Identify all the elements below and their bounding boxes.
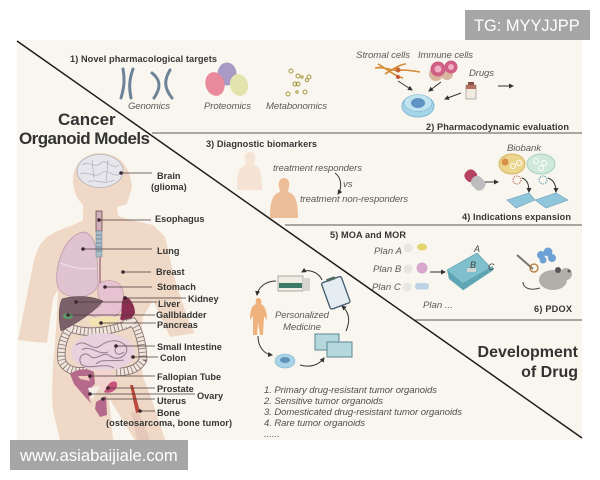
labels: plans: Plan C — [372, 282, 401, 293]
title: Cancer Organoid Models: Organoid Models — [19, 129, 150, 148]
label: metabonomics: Metabonomics — [266, 101, 327, 112]
icon: darker person — [270, 178, 298, 218]
organ labels: (glioma) — [151, 182, 187, 192]
organ labels: Liver — [158, 299, 180, 309]
icon: petri dish — [402, 94, 434, 117]
arrows: personalized medicine cycle — [257, 271, 349, 366]
labels: plans: Plan B — [373, 264, 402, 275]
organ: esophagus and trachea — [96, 211, 106, 286]
panel: background — [17, 40, 582, 440]
organ: uterus and fallopian tube — [70, 369, 117, 417]
organ labels: Esophagus — [155, 214, 205, 224]
labels: plate wells — [470, 244, 495, 272]
icon: drug bottle — [466, 82, 476, 99]
watermark: TG: TG: MYYJJPP — [474, 17, 580, 35]
icon: capsule — [462, 167, 488, 193]
organ pointer dots — [66, 171, 142, 413]
icon: syringe — [517, 255, 538, 272]
organ labels: Breast — [156, 267, 185, 277]
list: organoid types: ...... — [264, 429, 280, 440]
labels: plate wells: C — [488, 262, 495, 272]
arrows: into dish — [398, 81, 513, 99]
list: organoid types — [263, 385, 462, 440]
organ pointer lines — [68, 173, 195, 411]
icon: organoid plates — [315, 334, 352, 357]
list: organoid types: 3. Domesticated drug-resistant tumor organoids — [264, 407, 462, 418]
label: treatment non-responders: treatment non-responders — [300, 194, 408, 205]
label: vs: vs — [343, 179, 353, 190]
arrow: responders comparison — [335, 173, 341, 194]
heading: MOA and MOR: 5) MOA and MOR — [330, 230, 406, 240]
icon: immune cells — [429, 60, 458, 81]
arrows: organoids to plates — [522, 178, 556, 192]
heading: novel pharmacological targets: 1) Novel pharmacological targets — [70, 54, 217, 64]
organ labels: Brain — [157, 171, 181, 181]
organ: gallbladder — [63, 313, 73, 319]
organ labels: Lung — [157, 246, 179, 256]
title: Cancer Organoid Models: Cancer — [58, 110, 116, 129]
organ labels: Colon — [160, 353, 186, 363]
organ labels: Prostate — [157, 384, 194, 394]
organ labels: (osteosarcoma, bone tumor) — [106, 418, 232, 428]
organ: small intestine — [71, 333, 135, 371]
icon: organoid circles — [513, 176, 547, 184]
heading: pharmacodynamic evaluation: 2) Pharmacodynamic evaluation — [426, 122, 569, 132]
watermark: website: www.asiabaijiale.com — [19, 446, 178, 465]
icon: organoid dish — [275, 354, 295, 368]
organ labels — [106, 171, 232, 428]
organ labels: Pancreas — [157, 320, 198, 330]
icon: stromal cells — [375, 64, 420, 79]
organ: bone — [130, 385, 150, 440]
label: immune cells: Immune cells — [418, 50, 473, 61]
organ: brain — [77, 154, 123, 188]
icon: mouse — [523, 267, 572, 290]
icon: blue cells — [537, 248, 556, 264]
watermark: website — [10, 440, 188, 470]
label: drugs: Drugs — [469, 68, 494, 79]
organ labels: Bone — [157, 408, 180, 418]
illustration: human body — [18, 153, 195, 440]
organ: lung — [57, 232, 98, 297]
icon: well plates — [507, 193, 568, 208]
labels: plate wells: B — [470, 260, 476, 270]
title: Development of Drug — [478, 344, 579, 381]
list: organoid types: 2. Sensitive tumor organoids — [263, 396, 383, 407]
organ labels: Kidney — [188, 294, 220, 304]
organ labels: Stomach — [157, 282, 196, 292]
organ labels: Uterus — [157, 396, 186, 406]
icon: biobank dishes — [499, 154, 555, 174]
icon: multi-well plate — [447, 253, 493, 290]
organ labels: Fallopian Tube — [157, 372, 221, 382]
title: Development of Drug: Development — [478, 344, 579, 361]
heading: diagnostic biomarkers: 3) Diagnostic biomarkers — [206, 139, 317, 149]
icon: chromosomes — [121, 69, 172, 98]
icon: drug box — [278, 276, 310, 291]
arrow: capsule to dish — [485, 181, 498, 183]
watermark: TG — [465, 10, 590, 40]
labels: plans: Plan ... — [423, 300, 453, 311]
arrow: plans to plate — [430, 271, 445, 273]
label: treatment responders: treatment responders — [273, 163, 362, 174]
organ: kidney — [120, 296, 135, 321]
label: personalized medicine: Personalized — [275, 310, 330, 321]
icons: plan pills — [402, 244, 429, 292]
label: stromal cells: Stromal cells — [356, 50, 410, 61]
icon: metabolite circles — [286, 69, 311, 96]
heading: PDOX: 6) PDOX — [534, 304, 573, 314]
title: Cancer Organoid Models — [19, 110, 150, 148]
organ: stomach — [86, 281, 124, 319]
icon: light person — [237, 152, 262, 190]
icon: clipboard — [320, 274, 350, 310]
list: organoid types: 4. Rare tumor organoids — [264, 418, 365, 429]
label: proteomics: Proteomics — [204, 101, 251, 112]
label: biobank: Biobank — [507, 143, 542, 154]
list: organoid types: 1. Primary drug-resistant tumor organoids — [264, 385, 437, 396]
labels: plate wells: A — [473, 244, 480, 254]
panel dividers — [17, 41, 582, 438]
organ labels: Ovary — [197, 391, 224, 401]
organ labels: Gallbladder — [156, 310, 207, 320]
icon: person — [250, 298, 267, 335]
labels: plans — [372, 246, 453, 311]
organ labels: Small Intestine — [157, 342, 222, 352]
label: personalized medicine — [275, 310, 330, 333]
icon: protein blobs — [203, 62, 251, 98]
labels: plans: Plan A — [374, 246, 402, 257]
organ: colon — [61, 322, 143, 372]
title: Development of Drug: of Drug — [521, 364, 578, 381]
organ: liver — [59, 297, 103, 331]
label: personalized medicine: Medicine — [283, 322, 321, 333]
heading: indications expansion: 4) Indications expansion — [462, 212, 571, 222]
organ: pancreas — [88, 316, 119, 326]
label: genomics: Genomics — [128, 101, 170, 112]
